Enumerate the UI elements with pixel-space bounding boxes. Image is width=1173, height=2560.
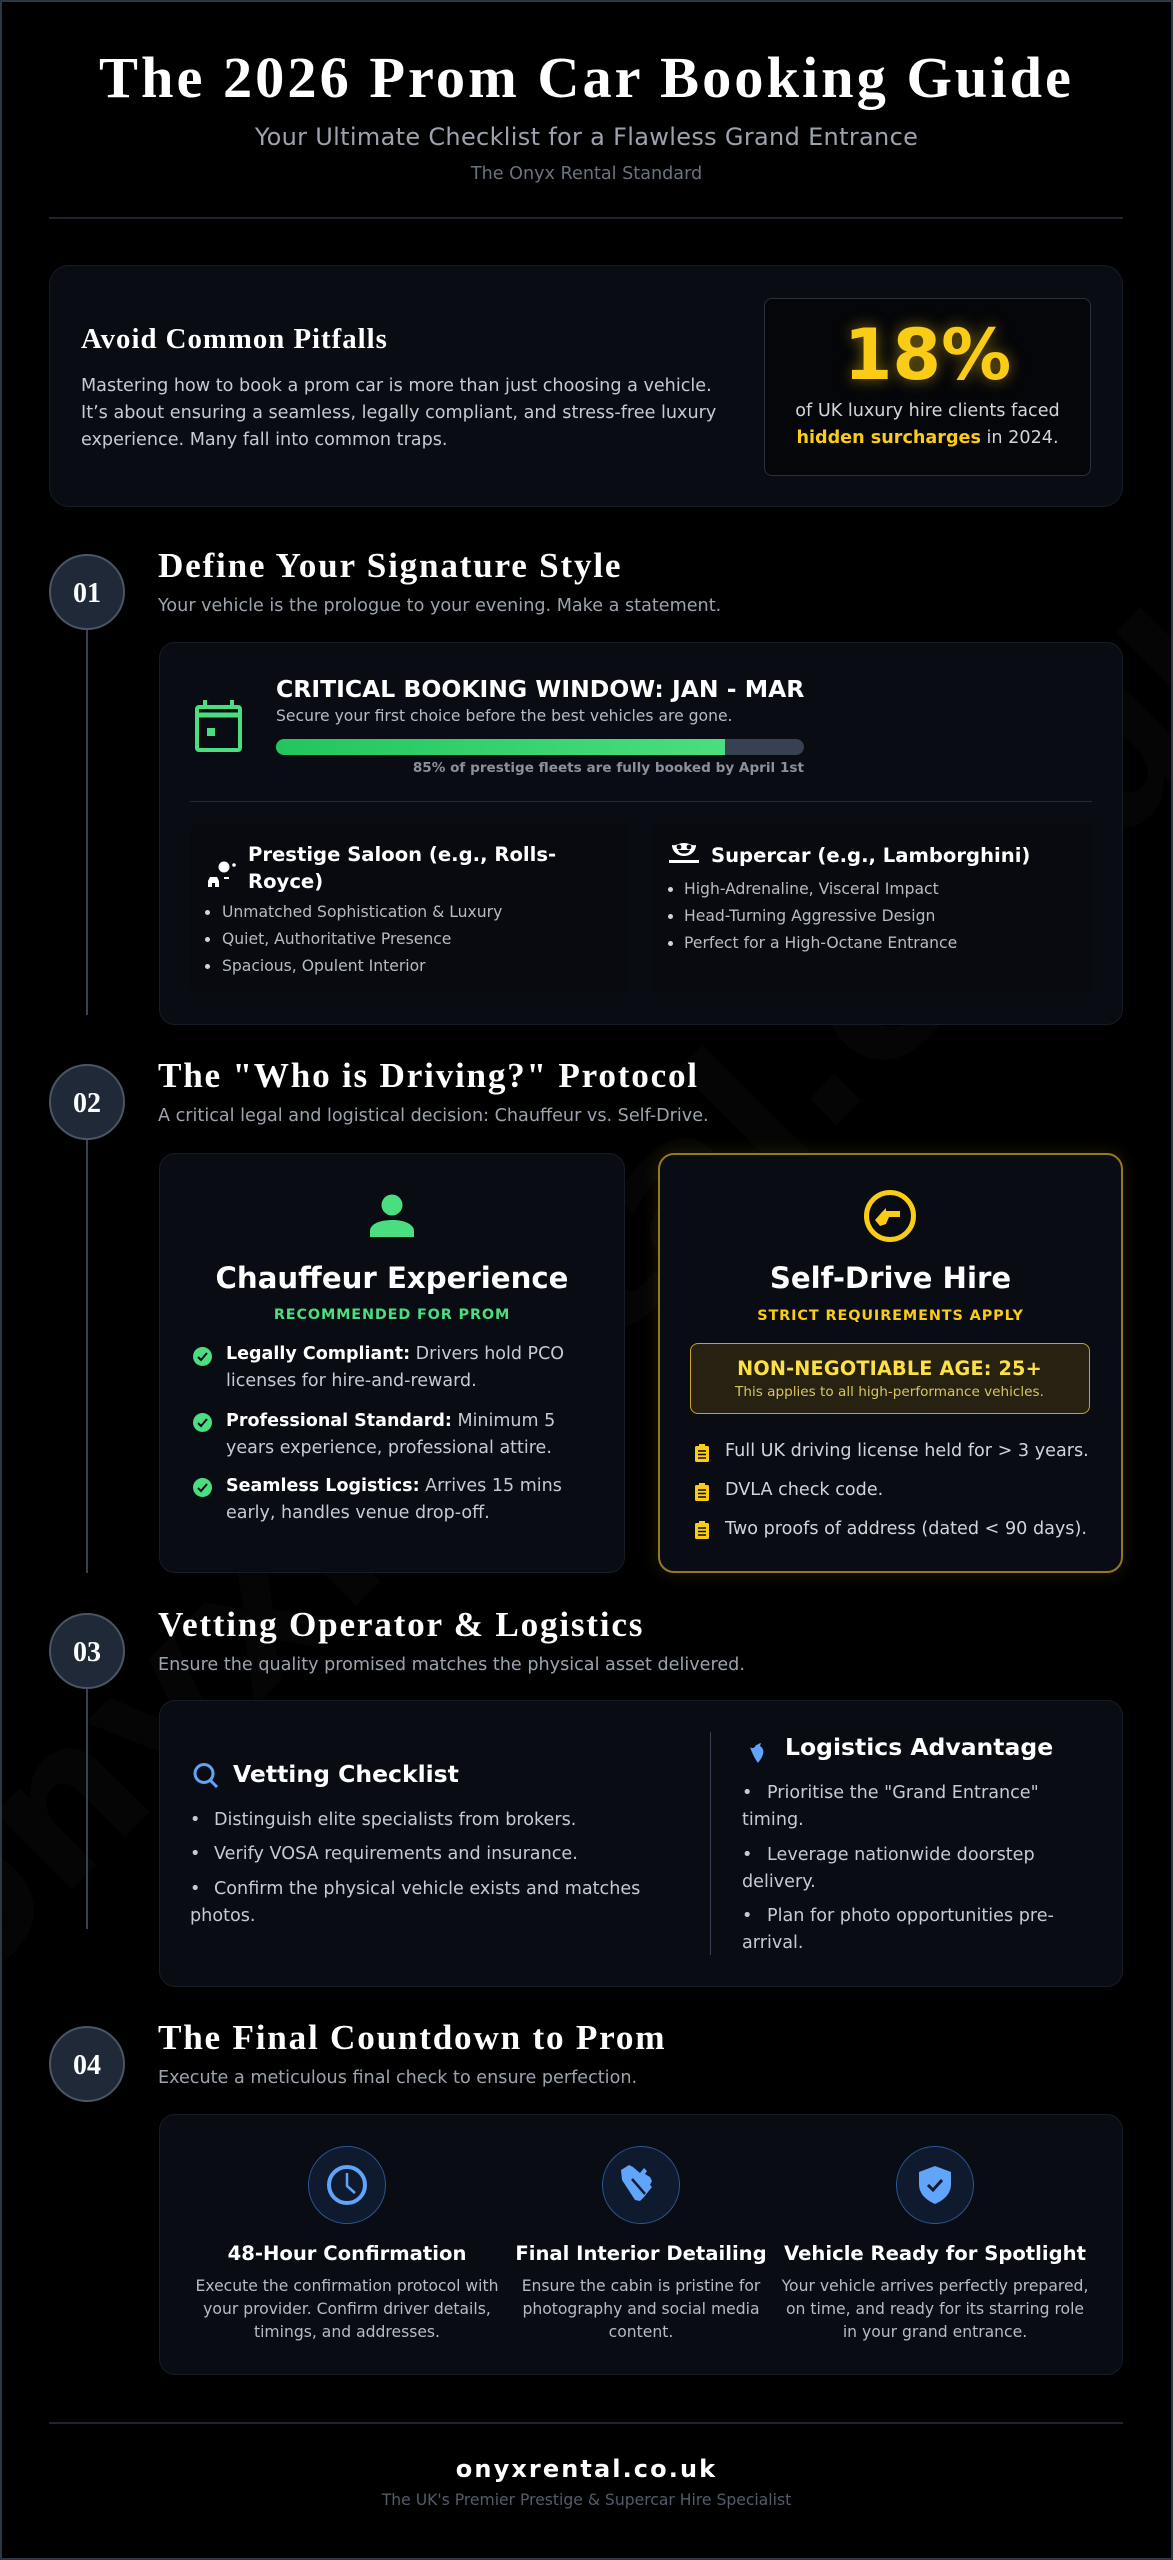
- tagline: The Onyx Rental Standard: [471, 164, 702, 184]
- icon: steering: [864, 1190, 916, 1242]
- check icon 1: [193, 1347, 212, 1366]
- panel: supercar: [652, 824, 1092, 993]
- progress note: 85% of prestige fleets are fully booked by April 1st: [413, 760, 804, 776]
- countdown item 2 text: Ensure the cabin is pristine for: [522, 2277, 760, 2295]
- subtitle: Your Ultimate Checklist for a Flawless Grand Entrance: [255, 123, 918, 151]
- vetting list: Distinguish elite specialists from brokers.: [214, 1810, 576, 1830]
- step number 01: [49, 554, 125, 630]
- icon: location pin: [750, 1743, 764, 1763]
- pitfalls heading: Avoid Common Pitfalls: [81, 323, 388, 355]
- step number 04: 04: [73, 2050, 101, 2081]
- chauffeur item 2: [226, 1411, 555, 1458]
- chauffeur item 3: [226, 1476, 562, 1523]
- chauffeur item 1: [226, 1344, 564, 1391]
- chauffeur item 1: Legally Compliant: Drivers hold PCO: [226, 1344, 564, 1364]
- clipboard icon 3: [695, 1521, 709, 1539]
- countdown item 1 title: 48-Hour Confirmation: [228, 2242, 466, 2265]
- pitfalls text: Mastering how to book a prom car is more than just choosing a vehicle.: [81, 376, 712, 396]
- requirement 3: Two proofs of address (dated < 90 days).: [725, 1519, 1087, 1539]
- logistics list: •: [742, 1906, 752, 1926]
- step number 04: [49, 2026, 125, 2102]
- footer tagline: The UK's Premier Prestige & Supercar Hire Specialist: [382, 2491, 791, 2509]
- supercar list: Perfect for a High-Octane Entrance: [684, 934, 957, 952]
- icon: prestige saloon: [208, 862, 236, 887]
- countdown item 1 text: your provider. Confirm driver details,: [203, 2300, 491, 2318]
- chauffeur title: Chauffeur Experience: [216, 1261, 568, 1295]
- countdown item 1 text: Execute the confirmation protocol with: [195, 2277, 499, 2295]
- subheading: step 3: Ensure the quality promised matches the physical asset delivered.: [158, 1655, 745, 1675]
- prestige heading: Prestige Saloon (e.g., Rolls-: [248, 843, 556, 866]
- logistics list: delivery.: [742, 1872, 816, 1892]
- prestige heading: Royce): [248, 870, 323, 893]
- logistics list: [742, 1783, 1054, 1953]
- check icon 2: [193, 1413, 212, 1432]
- logistics list: Prioritise the "Grand Entrance": [767, 1783, 1039, 1803]
- clipboard icon 2: [695, 1483, 709, 1501]
- countdown item 2 title: Final Interior Detailing: [515, 2242, 767, 2265]
- subheading: step 1: Your vehicle is the prologue to your evening. Make a statement.: [158, 596, 721, 616]
- stat callout: 18%: [764, 298, 1091, 476]
- icon: search: [194, 1763, 218, 1788]
- chauffeur item 3: Seamless Logistics: Arrives 15 mins: [226, 1476, 562, 1496]
- countdown item 1 text: timings, and addresses.: [254, 2323, 440, 2341]
- subheading: step 2: A critical legal and logistical decision: Chauffeur vs. Self-Drive.: [158, 1106, 709, 1126]
- chauffeur label: RECOMMENDED FOR PROM: [274, 1307, 510, 1323]
- subheading: step 4: Execute a meticulous final check to ensure perfection.: [158, 2068, 637, 2088]
- stat value: 18%: [844, 314, 1011, 396]
- step number 03: [49, 1613, 125, 1689]
- age title: NON-NEGOTIABLE AGE: 25+: [737, 1357, 1042, 1380]
- supercar bullets: [668, 887, 673, 946]
- supercar list: High-Adrenaline, Visceral Impact: [684, 880, 939, 898]
- prestige bullets: [205, 910, 210, 969]
- logistics heading: Logistics Advantage: [785, 1733, 1053, 1761]
- stat caption: of UK luxury hire clients faced: [795, 401, 1060, 421]
- step number 02: [49, 1064, 125, 1140]
- heading: step 3: Vetting Operator & Logistics: [158, 1605, 644, 1644]
- prestige list: Unmatched Sophistication & Luxury: [222, 903, 502, 921]
- panel: prestige saloon: [190, 824, 628, 993]
- requirement 1: Full UK driving license held for > 3 years.: [725, 1441, 1089, 1461]
- countdown item 1 text: [195, 2277, 499, 2341]
- supercar heading: Supercar (e.g., Lamborghini): [711, 844, 1030, 867]
- requirement 2: DVLA check code.: [725, 1480, 883, 1500]
- heading: step 2: The "Who is Driving?" Protocol: [158, 1056, 699, 1095]
- prestige list: Quiet, Authoritative Presence: [222, 930, 451, 948]
- stat caption: [795, 401, 1060, 448]
- title: The 2026 Prom Car Booking Guide: [99, 45, 1074, 110]
- countdown item 3 text: Your vehicle arrives perfectly prepared,: [782, 2277, 1088, 2295]
- stat caption: hidden surcharges in 2024.: [796, 428, 1059, 448]
- prestige list: Spacious, Opulent Interior: [222, 957, 426, 975]
- supercar list: [684, 880, 957, 952]
- self-drive label: STRICT REQUIREMENTS APPLY: [757, 1308, 1024, 1324]
- countdown item 3 text: in your grand entrance.: [843, 2323, 1027, 2341]
- pitfalls text: [81, 376, 716, 450]
- vetting list: [190, 1810, 640, 1926]
- chauffeur item 2: years experience, professional attire.: [226, 1438, 552, 1458]
- panel: step 3: [159, 1700, 1123, 1987]
- age callout: [690, 1343, 1090, 1414]
- icon: detailing: [602, 2146, 680, 2224]
- logistics list: Leverage nationwide doorstep: [767, 1844, 1035, 1864]
- panel: avoid common pitfalls: [49, 265, 1123, 507]
- booking window title: CRITICAL BOOKING WINDOW: JAN - MAR: [276, 675, 804, 703]
- icon: shield: [896, 2146, 974, 2224]
- countdown item 2 text: [522, 2277, 760, 2341]
- logistics list: timing.: [742, 1810, 804, 1830]
- panel: self-drive: [658, 1153, 1123, 1573]
- progress fill 85%: [276, 739, 725, 755]
- countdown item 2 text: content.: [609, 2323, 673, 2341]
- age note: This applies to all high-performance vehicles.: [735, 1384, 1044, 1400]
- countdown item 2 text: photography and social media: [522, 2300, 760, 2318]
- countdown item 3 text: on time, and ready for its starring role: [786, 2300, 1084, 2318]
- supercar list: Head-Turning Aggressive Design: [684, 907, 935, 925]
- vetting list: •: [190, 1844, 200, 1864]
- logistics list: Plan for photo opportunities pre-: [767, 1906, 1054, 1926]
- chauffeur item 1: licenses for hire-and-reward.: [226, 1371, 477, 1391]
- step number 02: 02: [73, 1088, 101, 1119]
- pitfalls text: It’s about ensuring a seamless, legally compliant, and stress-free luxury: [81, 403, 716, 423]
- panel: step 1: [159, 642, 1123, 1025]
- vetting list: photos.: [190, 1906, 256, 1926]
- step number 03: 03: [73, 1637, 101, 1668]
- vetting list: •: [190, 1878, 200, 1898]
- icon: calendar: [195, 700, 242, 752]
- countdown item 3 title: Vehicle Ready for Spotlight: [784, 2242, 1086, 2265]
- vetting list: Confirm the physical vehicle exists and matches: [214, 1878, 640, 1898]
- logistics list: arrival.: [742, 1933, 804, 1953]
- footer domain: onyxrental.co.uk: [456, 2455, 717, 2483]
- step number 01: 01: [73, 578, 101, 609]
- clipboard icon 1: [695, 1444, 709, 1462]
- vetting heading: Vetting Checklist: [233, 1760, 459, 1788]
- self-drive title: Self-Drive Hire: [770, 1261, 1011, 1295]
- heading: step 1: Define Your Signature Style: [158, 546, 622, 585]
- heading: step 4: The Final Countdown to Prom: [158, 2018, 666, 2057]
- check icon 3: [193, 1478, 212, 1497]
- pitfalls text: experience. Many fall into common traps.: [81, 430, 448, 450]
- logistics list: •: [742, 1783, 752, 1803]
- progress bar: [276, 739, 804, 755]
- panel: step 4: [159, 2114, 1123, 2375]
- icon: person: [370, 1194, 414, 1237]
- booking window text: Secure your first choice before the best vehicles are gone.: [276, 707, 733, 725]
- vetting list: Verify VOSA requirements and insurance.: [214, 1844, 578, 1864]
- chauffeur item 2: Professional Standard: Minimum 5: [226, 1411, 555, 1431]
- panel: chauffeur: [159, 1153, 625, 1573]
- logistics list: •: [742, 1844, 752, 1864]
- chauffeur item 3: early, handles venue drop-off.: [226, 1503, 490, 1523]
- countdown item 3 text: [782, 2277, 1088, 2341]
- icon: supercar: [669, 843, 699, 863]
- prestige list: [222, 903, 502, 975]
- prestige heading: [248, 843, 556, 893]
- icon: clock: [308, 2146, 386, 2224]
- vetting list: •: [190, 1810, 200, 1830]
